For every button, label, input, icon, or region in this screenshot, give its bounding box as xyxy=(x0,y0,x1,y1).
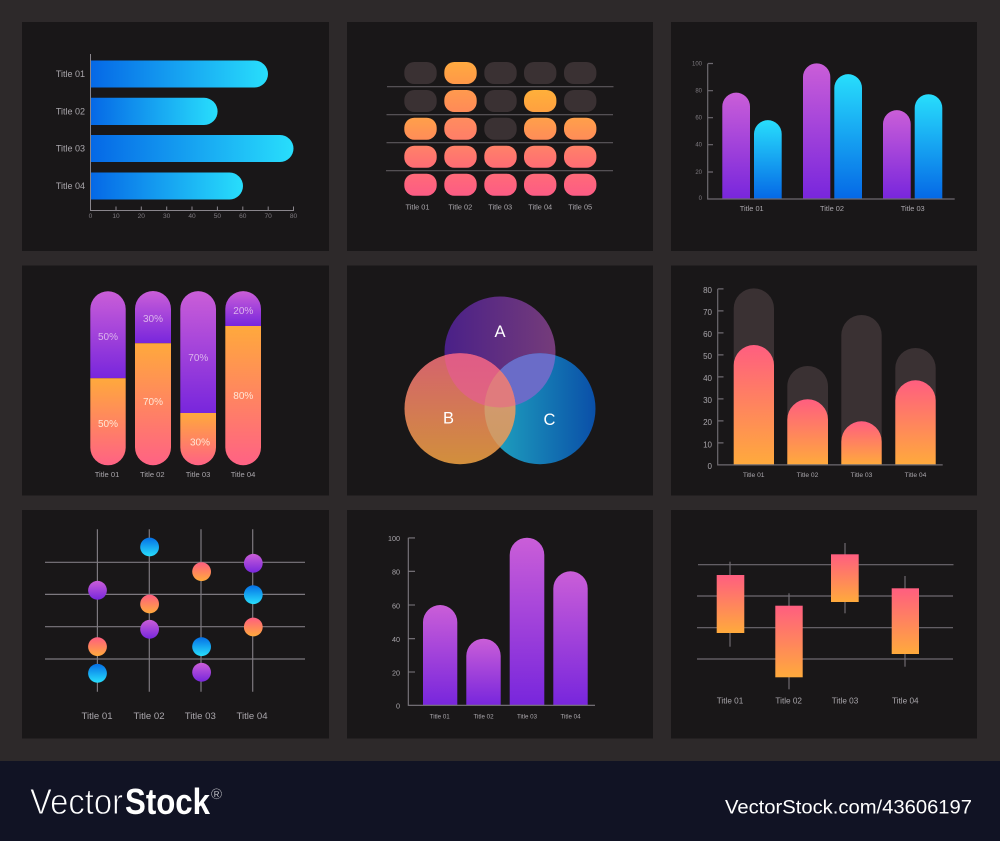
logo wordmark xyxy=(30,781,222,822)
category labels: Title 01 xyxy=(740,204,764,213)
dots: column 2 xyxy=(140,538,159,639)
percentages: lower: 80% xyxy=(233,391,253,402)
panel: candlestick chart xyxy=(671,510,977,738)
circle labels: A xyxy=(494,323,506,341)
circle A xyxy=(444,296,556,408)
axis values xyxy=(703,286,713,471)
axis values: 40 xyxy=(392,635,400,644)
footer bar xyxy=(0,761,1000,841)
panel: stacked pills xyxy=(22,266,329,496)
axis values: 0 xyxy=(708,462,713,471)
panel: dot grid chart xyxy=(22,510,329,738)
pill 2 xyxy=(135,291,171,465)
category labels xyxy=(430,714,581,720)
axis values: 20 xyxy=(138,213,145,220)
background columns xyxy=(734,288,936,465)
axis values: 40 xyxy=(695,143,703,149)
column labels: Title 04 xyxy=(528,202,552,212)
category labels xyxy=(740,204,925,213)
pill 4 xyxy=(225,291,261,465)
percentages: lower: 70% xyxy=(143,397,163,408)
axis values xyxy=(388,534,400,710)
percentages: upper xyxy=(98,306,253,364)
category labels: Title 03 xyxy=(832,696,859,705)
image id text: VectorStock.com/43606197 xyxy=(725,798,972,818)
category labels: Title 03 xyxy=(851,472,873,479)
axis values: 10 xyxy=(112,213,120,220)
percentages: upper: 50% xyxy=(98,332,118,343)
panel: venn diagram xyxy=(347,266,653,496)
category labels: Title 03 xyxy=(186,470,210,479)
axis values: 20 xyxy=(392,668,400,677)
axis values: 30 xyxy=(163,213,171,220)
category labels: Title 02 xyxy=(797,472,819,479)
axis values: 100 xyxy=(388,534,400,543)
category labels xyxy=(95,470,255,479)
panel: horizontal bar chart xyxy=(22,22,329,251)
axis values: 60 xyxy=(695,116,703,122)
category labels: Title 04 xyxy=(560,714,581,720)
column labels xyxy=(81,711,268,722)
axis values: 40 xyxy=(703,374,713,383)
category labels xyxy=(56,69,85,191)
axis values: 80 xyxy=(290,213,297,220)
axis values: 0 xyxy=(396,702,400,710)
overlap B and C xyxy=(484,370,516,447)
column labels: Title 01 xyxy=(406,202,429,212)
horizontal bars xyxy=(91,60,294,200)
axis values: 10 xyxy=(703,440,713,450)
blocks xyxy=(404,62,596,196)
percentages: upper: 20% xyxy=(233,306,253,317)
axis values: 80 xyxy=(703,286,713,295)
grid lines xyxy=(45,529,305,692)
category labels xyxy=(717,696,919,705)
axis values: 60 xyxy=(239,213,247,220)
column labels: Title 02 xyxy=(448,202,472,212)
circle C xyxy=(484,353,596,464)
percentages: lower: 30% xyxy=(190,438,210,448)
axis values: 30 xyxy=(703,396,713,405)
axes xyxy=(90,54,294,210)
overlap A and B xyxy=(444,353,516,406)
logo wordmark: Vector xyxy=(30,781,123,822)
overlap A and C xyxy=(500,353,556,406)
grid lines xyxy=(697,565,954,659)
axis values: 40 xyxy=(188,213,196,220)
axis values: 50 xyxy=(214,213,221,220)
circle labels: B xyxy=(443,410,454,428)
purple columns xyxy=(722,63,911,199)
axis values: 70 xyxy=(265,213,272,220)
circle labels: C xyxy=(544,411,556,429)
category labels: Title 01 xyxy=(95,470,119,479)
category labels: Title 03 xyxy=(56,144,85,154)
axis values: 60 xyxy=(703,330,713,339)
row lines xyxy=(386,87,614,171)
panel: block matrix xyxy=(347,22,653,251)
axis values: 50 xyxy=(703,352,713,361)
panel: progress column chart xyxy=(671,266,977,496)
category labels: Title 01 xyxy=(717,696,744,705)
axis values: 20 xyxy=(703,418,713,427)
column labels: Title 02 xyxy=(133,711,165,722)
percentages: upper: 30% xyxy=(143,314,163,325)
category labels: Title 04 xyxy=(231,470,255,479)
centre overlap xyxy=(485,370,516,408)
panel: grouped column chart xyxy=(671,22,977,251)
axes xyxy=(718,289,943,465)
column labels: Title 05 xyxy=(568,202,592,212)
category labels: Title 02 xyxy=(775,696,802,705)
category labels: Title 02 xyxy=(140,470,165,479)
foreground columns xyxy=(734,345,936,465)
percentages: lower: 50% xyxy=(98,419,118,430)
axis values: 60 xyxy=(392,601,400,610)
axis values xyxy=(692,62,703,202)
circle labels xyxy=(443,323,556,429)
circle B xyxy=(404,353,516,464)
category labels: Title 03 xyxy=(901,204,925,213)
category labels: Title 01 xyxy=(56,69,85,79)
axis values: 80 xyxy=(695,89,703,95)
column labels: Title 01 xyxy=(81,711,113,722)
column labels: Title 03 xyxy=(488,202,512,212)
category labels: Title 02 xyxy=(473,714,494,720)
category labels: Title 01 xyxy=(743,472,765,479)
category labels: Title 04 xyxy=(892,696,919,705)
column labels xyxy=(406,202,592,212)
dots: column 1 xyxy=(88,581,107,683)
axes xyxy=(408,538,595,705)
blue columns xyxy=(754,74,942,199)
category labels: Title 03 xyxy=(517,714,538,720)
axis values: 0 xyxy=(89,213,93,220)
category labels: Title 02 xyxy=(56,106,85,116)
logo wordmark: ® xyxy=(211,786,222,803)
dots: column 3 xyxy=(192,562,211,682)
category labels: Title 01 xyxy=(430,714,450,720)
axis values: 0 xyxy=(699,196,703,202)
columns xyxy=(423,538,588,705)
wicks xyxy=(730,543,905,689)
percentages: upper: 70% xyxy=(188,353,208,364)
dots: column 4 xyxy=(244,554,263,636)
logo wordmark: Stock xyxy=(125,781,211,822)
axis values: 80 xyxy=(392,568,400,576)
candles xyxy=(717,554,919,677)
column labels: Title 04 xyxy=(236,711,268,722)
axes xyxy=(708,64,955,199)
axis values: 70 xyxy=(703,308,713,317)
axis values: 100 xyxy=(692,62,703,68)
percentages: lower xyxy=(98,391,253,448)
pill 1 xyxy=(90,291,126,465)
pill 3 xyxy=(180,291,216,465)
category labels: Title 02 xyxy=(820,204,844,213)
category labels: Title 04 xyxy=(56,181,85,191)
category labels xyxy=(743,472,927,479)
category labels: Title 04 xyxy=(905,472,927,479)
column labels: Title 03 xyxy=(185,711,216,722)
axis values: 20 xyxy=(695,170,703,176)
axis values xyxy=(89,213,297,220)
panel: purple column chart xyxy=(347,510,653,738)
